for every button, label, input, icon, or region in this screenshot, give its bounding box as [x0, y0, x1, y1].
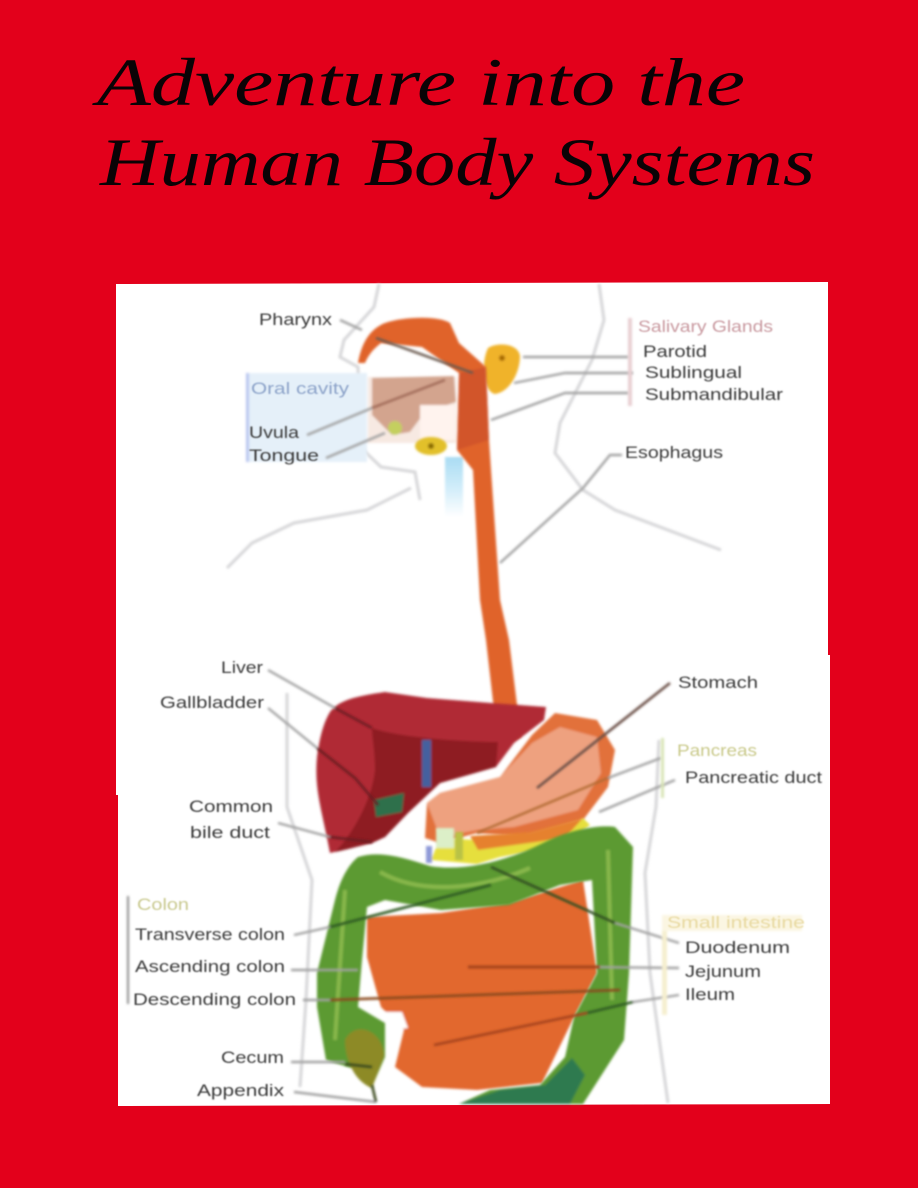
diagram labels: Stomach	[678, 673, 758, 692]
diagram labels: Cecum	[221, 1048, 284, 1067]
diagram labels: Appendix	[197, 1081, 285, 1100]
leader lines	[268, 320, 679, 1102]
diagram labels	[133, 310, 822, 1100]
diagram labels: Liver	[221, 658, 263, 677]
diagram labels: Ileum	[685, 985, 735, 1004]
label groups with brackets	[127, 318, 802, 1015]
diagram labels: bile duct	[190, 823, 270, 842]
diagram labels: Jejunum	[685, 962, 761, 981]
body outline	[227, 284, 721, 1103]
diagram labels: Uvula	[249, 423, 300, 442]
diagram labels: Pancreas	[677, 741, 757, 760]
diagram labels: Parotid	[643, 342, 707, 361]
diagram labels: Sublingual	[645, 363, 742, 382]
stomach	[425, 713, 615, 843]
diagram labels: Duodenum	[685, 938, 790, 957]
esophagus and pharynx	[358, 318, 521, 745]
diagram labels: Esophagus	[625, 443, 723, 462]
liver	[316, 692, 546, 853]
diagram labels: Pancreatic duct	[685, 768, 822, 787]
diagram labels: Gallbladder	[160, 693, 264, 712]
diagram labels: Salivary Glands	[638, 317, 773, 336]
small intestine	[367, 880, 597, 1090]
diagram labels: Ascending colon	[135, 957, 285, 976]
diagram labels: Small intestine	[667, 913, 805, 932]
diagram labels: Colon	[137, 895, 189, 914]
panel: digestive system diagram	[116, 282, 830, 1106]
diagram labels: Descending colon	[133, 990, 296, 1009]
diagram labels: Pharynx	[259, 310, 333, 329]
title: Human Body Systems	[99, 124, 815, 200]
diagram labels: Tongue	[249, 446, 319, 465]
colon	[317, 826, 633, 1104]
title	[92, 44, 815, 200]
diagram labels: Common	[189, 797, 273, 816]
salivary glands	[415, 344, 520, 455]
diagram labels: Oral cavity	[251, 379, 350, 398]
pancreas and duodenum	[426, 818, 590, 864]
diagram labels: Submandibular	[645, 385, 783, 404]
diagram labels: Transverse colon	[135, 925, 285, 944]
title: Adventure into the	[92, 44, 745, 120]
oral cavity	[246, 373, 463, 517]
